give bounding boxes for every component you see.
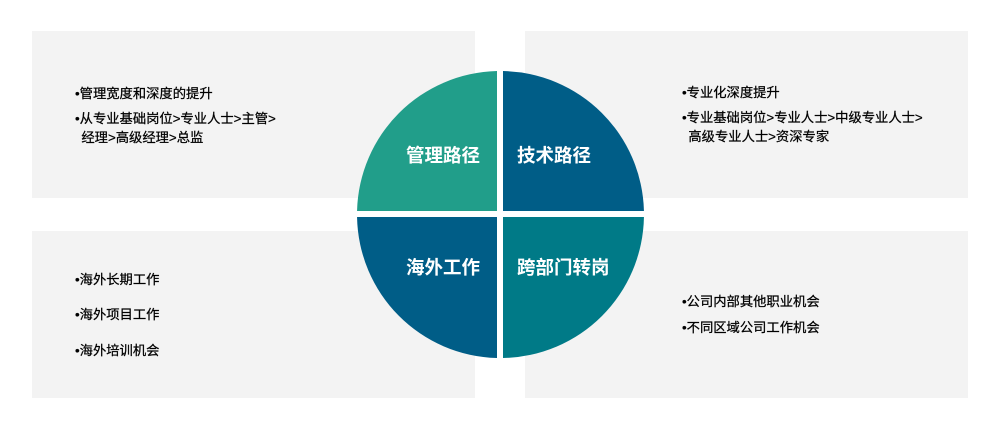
text: transfer bullet 1: •公司内部其他职业机会: [682, 294, 820, 309]
text: management path bullet 2: [75, 111, 276, 145]
text: technical path bullet 1: •专业化深度提升: [682, 85, 780, 100]
text: management path bullet 1: •管理宽度和深度的提升: [75, 86, 213, 101]
text: management path bullet 2: •从专业基础岗位>专业人士>主管>: [75, 111, 276, 126]
text: technical path bullet 2: •专业基础岗位>专业人士>中级专业人士>: [682, 110, 923, 125]
quadrant: technical path: [503, 71, 644, 211]
quadrant: overseas work: [357, 217, 497, 358]
quadrant: overseas work: 海外工作: [406, 257, 480, 278]
text: overseas bullet 2: •海外项目工作: [75, 307, 159, 322]
quadrant: technical path: 技术路径: [517, 145, 591, 166]
panel: cross-department transfer: [525, 231, 968, 398]
panel: technical path: [525, 31, 968, 198]
quadrant: cross-department transfer: [503, 217, 644, 358]
quadrant: cross-department transfer: 跨部门转岗: [517, 257, 610, 278]
text: management path bullet 2: 经理>高级经理>总监: [81, 130, 203, 145]
quadrant: management path: 管理路径: [406, 145, 480, 166]
text: technical path bullet 2: 高级专业人士>资深专家: [688, 129, 829, 144]
quadrant: management path: [357, 71, 497, 211]
text: overseas bullet 1: •海外长期工作: [75, 272, 159, 287]
text: overseas bullet 3: •海外培训机会: [75, 343, 159, 358]
text: technical path bullet 2: [682, 110, 923, 144]
panel: overseas work: [32, 231, 475, 398]
text: transfer bullet 2: •不同区域公司工作机会: [682, 320, 820, 335]
panel: management path: [32, 31, 475, 198]
